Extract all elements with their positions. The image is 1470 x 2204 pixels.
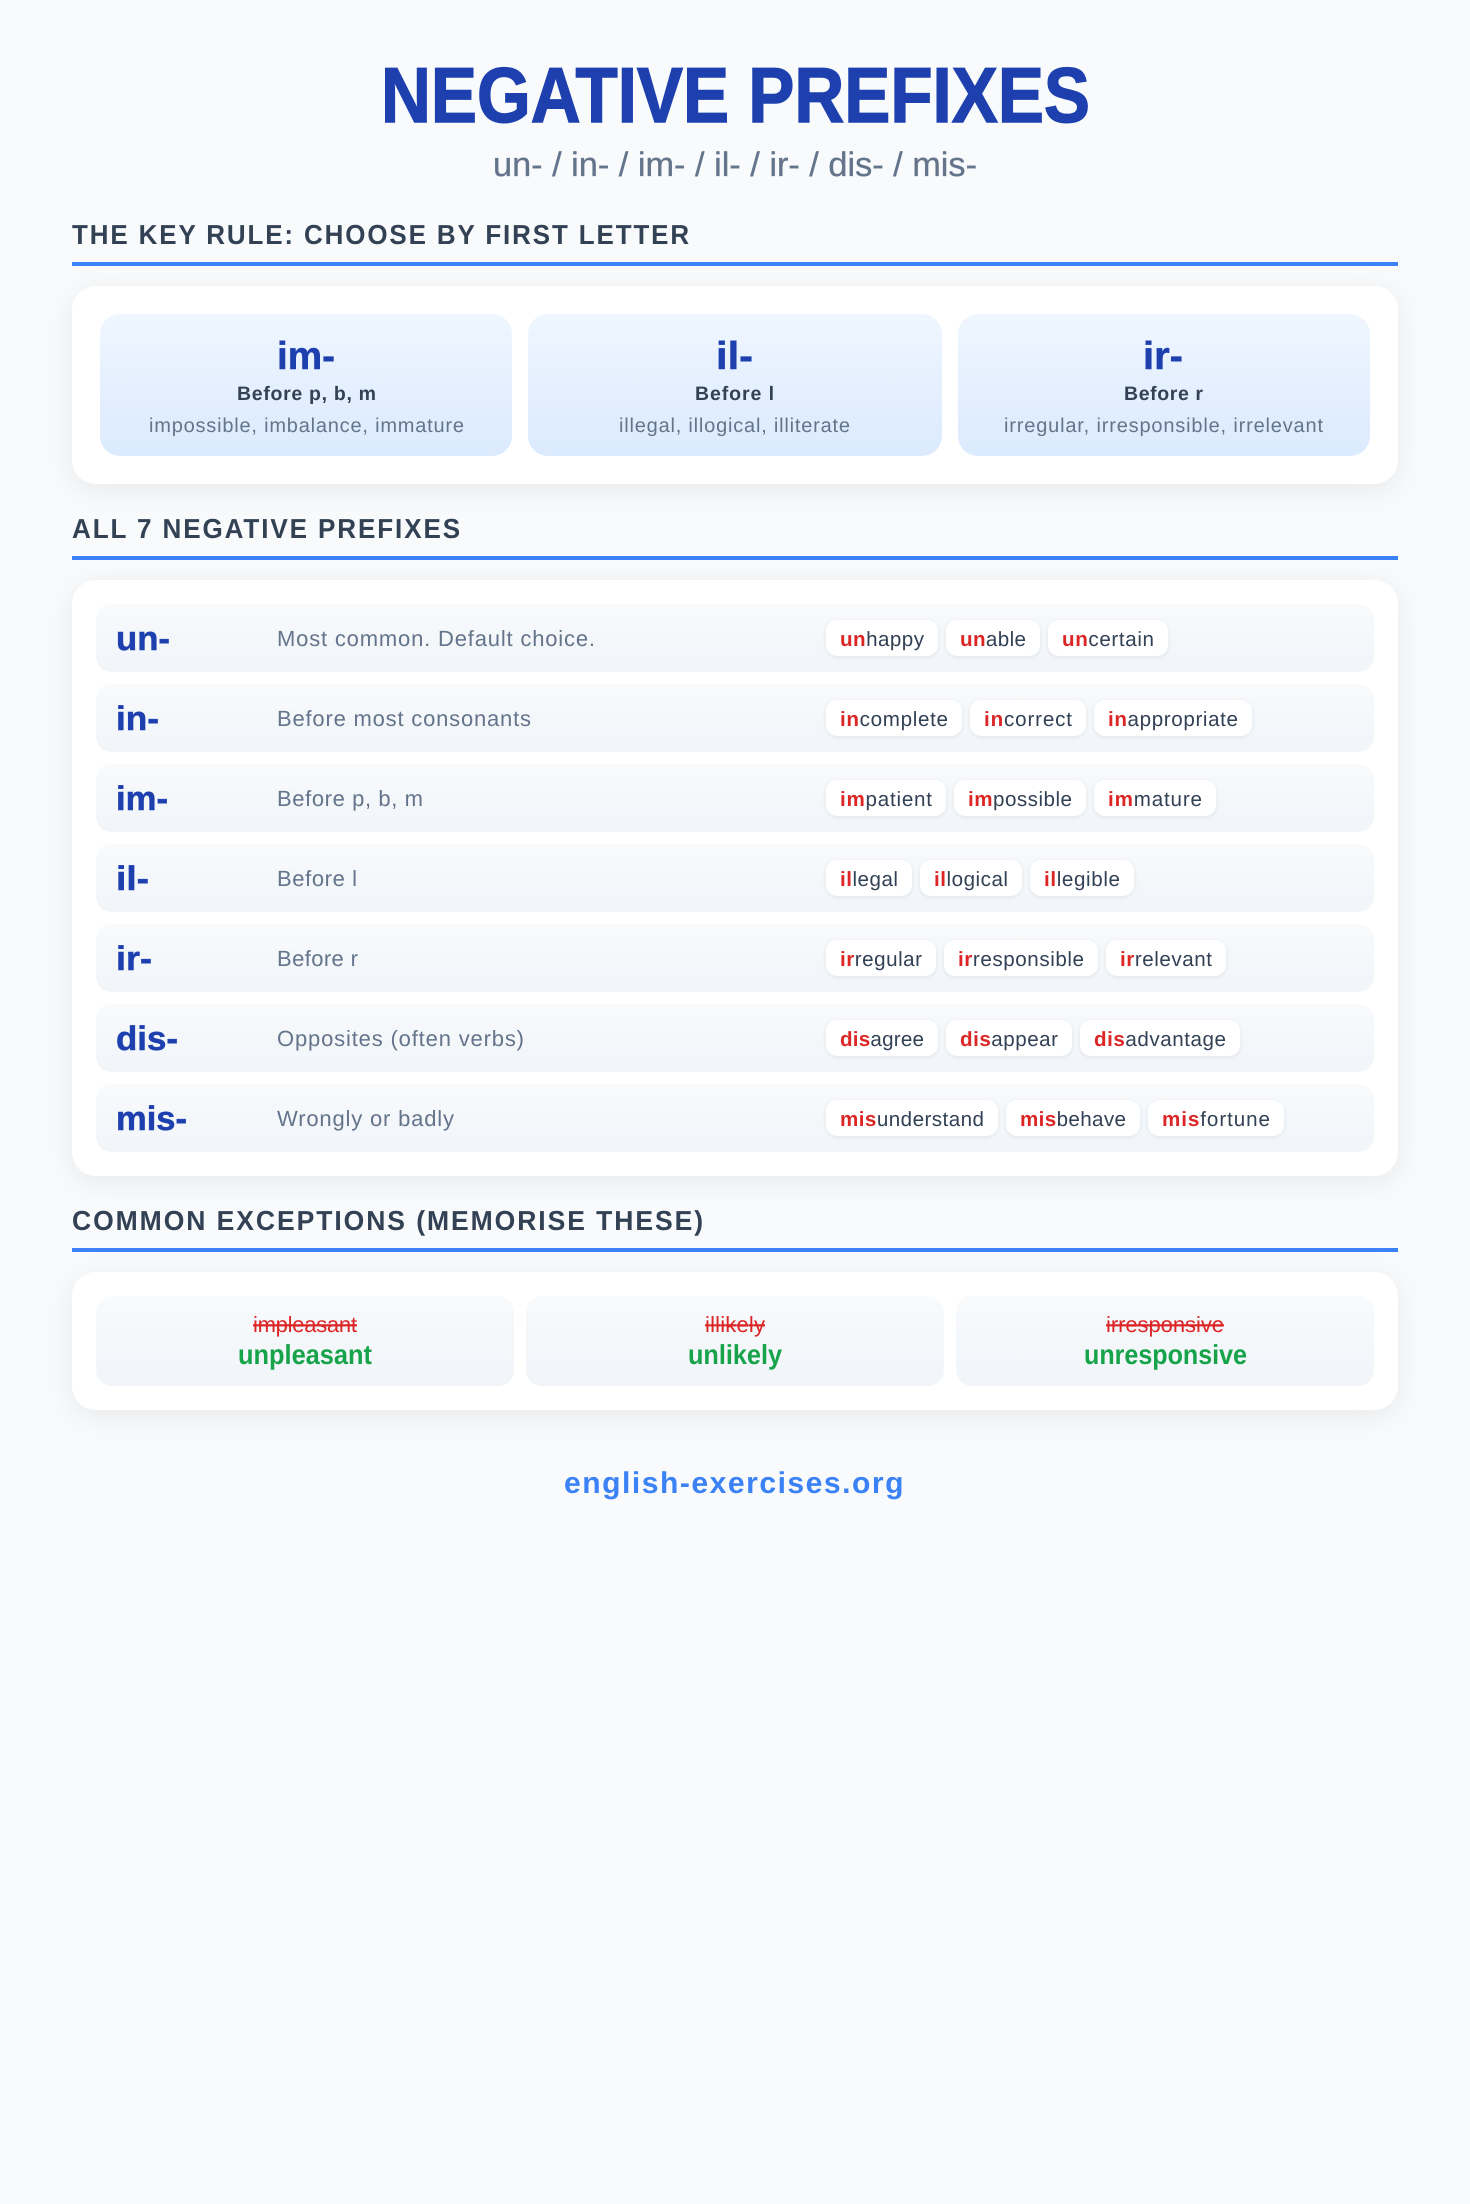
card: im- rule: impossible, imbalance, immature <box>149 415 464 437</box>
row: il-: illegal <box>840 868 898 891</box>
card: ir- rule: irregular, irresponsible, irrelevant <box>1004 415 1323 437</box>
row: mis-: mis- <box>116 1100 187 1138</box>
row: dis- <box>96 1004 1374 1072</box>
row: il-: illogical <box>934 868 1008 891</box>
row: im-: immature <box>1108 788 1202 811</box>
row: un- <box>96 604 1374 672</box>
card: im- rule: im- <box>277 335 335 378</box>
row: dis-: disappear <box>960 1028 1058 1051</box>
card: im- rule <box>100 314 512 456</box>
row: im- <box>96 764 1374 832</box>
panel: common exceptions <box>72 1272 1398 1410</box>
row: dis-: disadvantage <box>1094 1028 1226 1051</box>
row: ir- <box>96 924 1374 992</box>
heading: the key rule: THE KEY RULE: CHOOSE BY FIRST LETTER <box>72 219 691 250</box>
row: in- <box>96 684 1374 752</box>
row: un-: unable <box>960 628 1026 651</box>
card: ir- rule: Before r <box>1124 383 1203 405</box>
row: in-: in- <box>116 700 159 738</box>
row: dis-: Opposites (often verbs) <box>277 1026 524 1051</box>
card: unpleasant <box>96 1296 514 1386</box>
card: ir- rule: ir- <box>1143 335 1183 378</box>
row: im-: impossible <box>968 788 1072 811</box>
row: ir-: Before r <box>277 946 358 971</box>
row: ir-: irrelevant <box>1120 948 1212 971</box>
footer: website: english-exercises.org <box>564 1467 905 1500</box>
row: ir-: irresponsible <box>958 948 1084 971</box>
title: NEGATIVE PREFIXES <box>381 51 1090 139</box>
panel: key rule <box>72 286 1398 484</box>
row: ir-: irregular <box>840 948 922 971</box>
row: un-: Most common. Default choice. <box>277 626 595 651</box>
card: unpleasant: unpleasant <box>238 1339 372 1370</box>
row: in-: incorrect <box>984 708 1072 731</box>
row: mis-: misunderstand <box>840 1108 984 1131</box>
card: il- rule: Before l <box>695 383 774 405</box>
row: un-: un- <box>116 620 170 658</box>
row: dis-: disagree <box>840 1028 924 1051</box>
row: in-: Before most consonants <box>277 706 531 731</box>
subtitle: un- / in- / im- / il- / ir- / dis- / mis- <box>493 146 977 184</box>
row: un-: uncertain <box>1062 628 1154 651</box>
row: il-: il- <box>116 860 149 898</box>
card: im- rule: Before p, b, m <box>237 383 376 405</box>
card: unlikely <box>526 1296 944 1386</box>
row: mis-: misfortune <box>1162 1108 1270 1131</box>
heading: all 7 prefixes: ALL 7 NEGATIVE PREFIXES <box>72 513 462 544</box>
card: unlikely: illikely <box>705 1312 765 1337</box>
row: il- <box>96 844 1374 912</box>
row: dis-: dis- <box>116 1020 178 1058</box>
row: mis-: misbehave <box>1020 1108 1126 1131</box>
card: il- rule: il- <box>716 335 753 378</box>
card: ir- rule <box>958 314 1370 456</box>
card: unresponsive: irresponsive <box>1106 1312 1224 1337</box>
heading: common exceptions: COMMON EXCEPTIONS (MEMORISE THESE) <box>72 1205 705 1236</box>
row: mis- <box>96 1084 1374 1152</box>
card: unresponsive: unresponsive <box>1084 1339 1247 1370</box>
card: il- rule <box>528 314 942 456</box>
row: im-: im- <box>116 780 168 818</box>
panel: all 7 negative prefixes <box>72 580 1398 1176</box>
row: im-: Before p, b, m <box>277 786 423 811</box>
row: il-: Before l <box>277 866 357 891</box>
card: unresponsive <box>956 1296 1374 1386</box>
row: il-: illegible <box>1044 868 1120 891</box>
row: in-: incomplete <box>840 708 948 731</box>
row: mis-: Wrongly or badly <box>277 1106 454 1131</box>
card: unpleasant: impleasant <box>253 1312 357 1337</box>
row: ir-: ir- <box>116 940 152 978</box>
card: il- rule: illegal, illogical, illiterate <box>619 415 850 437</box>
row: in-: inappropriate <box>1108 708 1238 731</box>
row: un-: unhappy <box>840 628 925 651</box>
card: unlikely: unlikely <box>688 1339 783 1370</box>
row: im-: impatient <box>840 788 932 811</box>
